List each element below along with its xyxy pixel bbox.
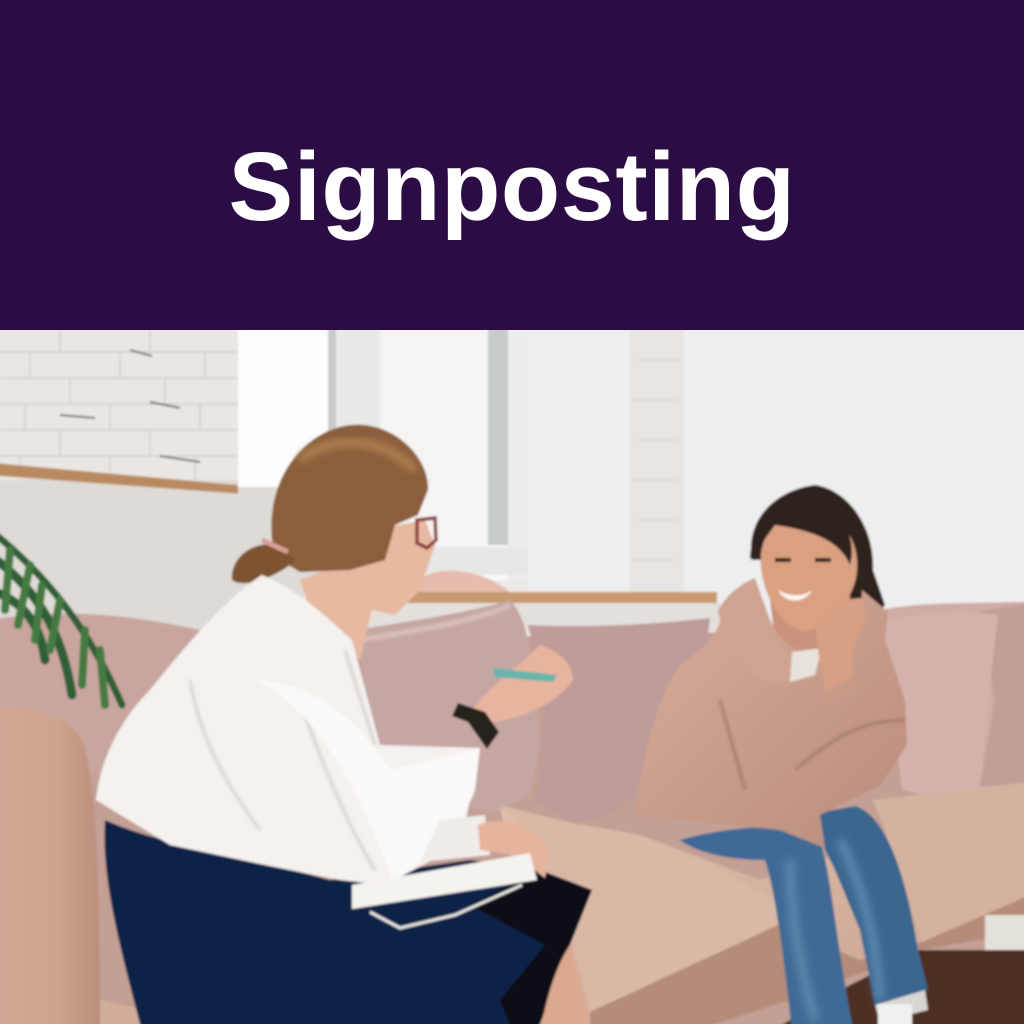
- teal pen: [493, 668, 557, 682]
- counsellor neck and head: [300, 520, 435, 660]
- header banner: [0, 0, 1024, 330]
- jeans: [680, 806, 928, 1024]
- hand on cheek: [815, 598, 866, 692]
- wooden ledge: [0, 460, 270, 496]
- wall pillar: [528, 290, 684, 592]
- pink hoodie: [636, 578, 907, 848]
- counsellor lower hand: [478, 821, 550, 878]
- window sill with pink cloth: [355, 571, 720, 631]
- sofa back and cushions: [0, 600, 1024, 822]
- neck: [770, 590, 850, 680]
- plant: [0, 530, 122, 705]
- white notebook: [352, 853, 537, 909]
- counsellor skirt: [104, 820, 592, 1024]
- counsellor: [96, 425, 592, 1024]
- room background: [0, 290, 1024, 1024]
- young woman: [636, 485, 928, 1024]
- counsellor raised hand: [470, 645, 573, 725]
- window: [238, 290, 533, 597]
- counsellor white shirt: [96, 575, 480, 885]
- title: Signposting: [229, 132, 795, 241]
- wristwatch: [452, 703, 499, 749]
- sofa base: [0, 625, 1024, 1024]
- sofa armrest foreground: [0, 706, 100, 1024]
- counsellor hair: [271, 425, 428, 572]
- hair back: [751, 485, 885, 625]
- counsellor glasses: [417, 518, 436, 548]
- sofa seat: [500, 778, 1024, 1024]
- face: [761, 510, 857, 632]
- brick wall: [0, 290, 240, 480]
- photo: counsellor talking with a smiling young woman on a sofa: [0, 330, 1024, 1024]
